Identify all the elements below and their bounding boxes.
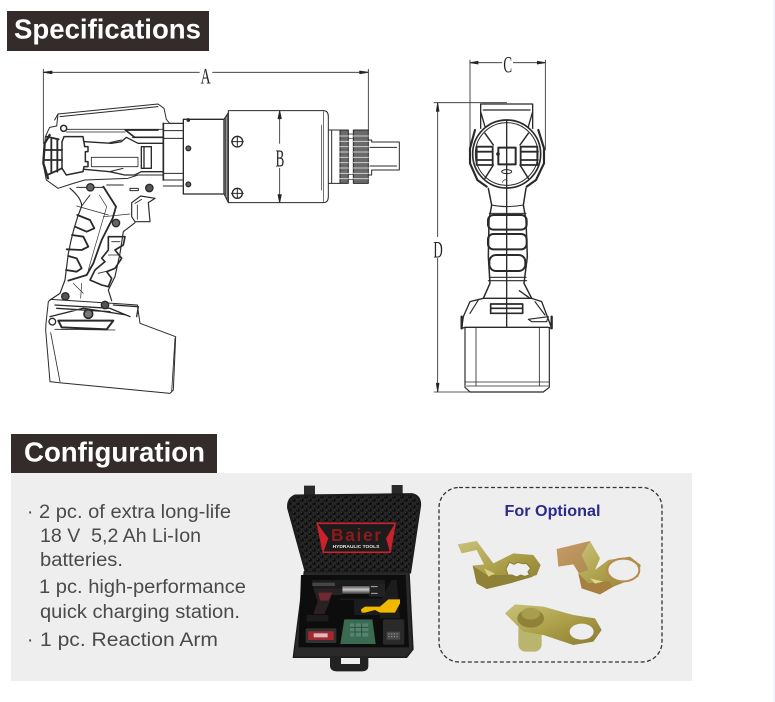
pistol grip	[50, 184, 155, 301]
motor housing	[43, 104, 183, 188]
right edge strip	[773, 0, 775, 702]
side view technical drawing	[43, 63, 399, 393]
arm 1	[458, 541, 541, 589]
arm 3	[505, 604, 602, 652]
dimension B: B	[276, 147, 284, 173]
logo: HYDRAULIC TOOLS	[333, 544, 380, 550]
output knurl and square drive	[328, 130, 399, 183]
charging station green	[340, 619, 376, 644]
dimension C	[470, 53, 545, 150]
spare unit black	[383, 619, 404, 645]
configuration list text: 1 pc. high-performance	[39, 577, 246, 598]
battery shoulders and pack	[462, 298, 552, 392]
heading: Specifications: Specifications	[14, 14, 201, 44]
configuration list text: 2 pc. of extra long-life	[39, 502, 231, 523]
head and rear cap	[470, 104, 544, 188]
case handle	[330, 656, 368, 671]
dimension D	[433, 103, 507, 392]
battery	[306, 628, 336, 643]
dimension A: A	[201, 63, 211, 88]
configuration list text	[27, 502, 246, 651]
reaction arm yellow	[361, 599, 400, 613]
configuration list text: 18 V 5,2 Ah Li-Ion	[40, 526, 201, 547]
front view technical drawing	[433, 53, 552, 392]
torque wrench tool	[307, 580, 385, 622]
battery pack	[46, 293, 176, 393]
grip	[483, 120, 532, 327]
panel: configuration	[11, 473, 692, 681]
case lid with foam	[288, 494, 420, 572]
dimension B	[276, 111, 284, 203]
foam insert ridges	[338, 580, 400, 618]
case latches	[304, 485, 403, 496]
dimension C: C	[503, 53, 512, 79]
configuration list text: batteries.	[40, 550, 123, 571]
heading: Configuration: Configuration	[24, 436, 205, 468]
heading: For Optional: For Optional	[504, 503, 600, 520]
heading: Configuration	[11, 434, 217, 474]
logo	[317, 523, 395, 552]
gear head	[183, 111, 328, 203]
arm 2	[557, 541, 641, 594]
case base	[293, 572, 413, 671]
logo: Baier	[331, 525, 381, 545]
dimension D: D	[433, 237, 443, 263]
optional reaction arms	[458, 541, 641, 652]
configuration list text: ·	[27, 630, 33, 651]
configuration list text: quick charging station.	[40, 602, 240, 623]
tool case photo	[288, 485, 420, 671]
configuration list text: ·	[27, 502, 33, 523]
configuration list text: 1 pc. Reaction Arm	[40, 630, 218, 651]
dimension A	[43, 63, 368, 143]
optional accessories box	[439, 488, 662, 662]
